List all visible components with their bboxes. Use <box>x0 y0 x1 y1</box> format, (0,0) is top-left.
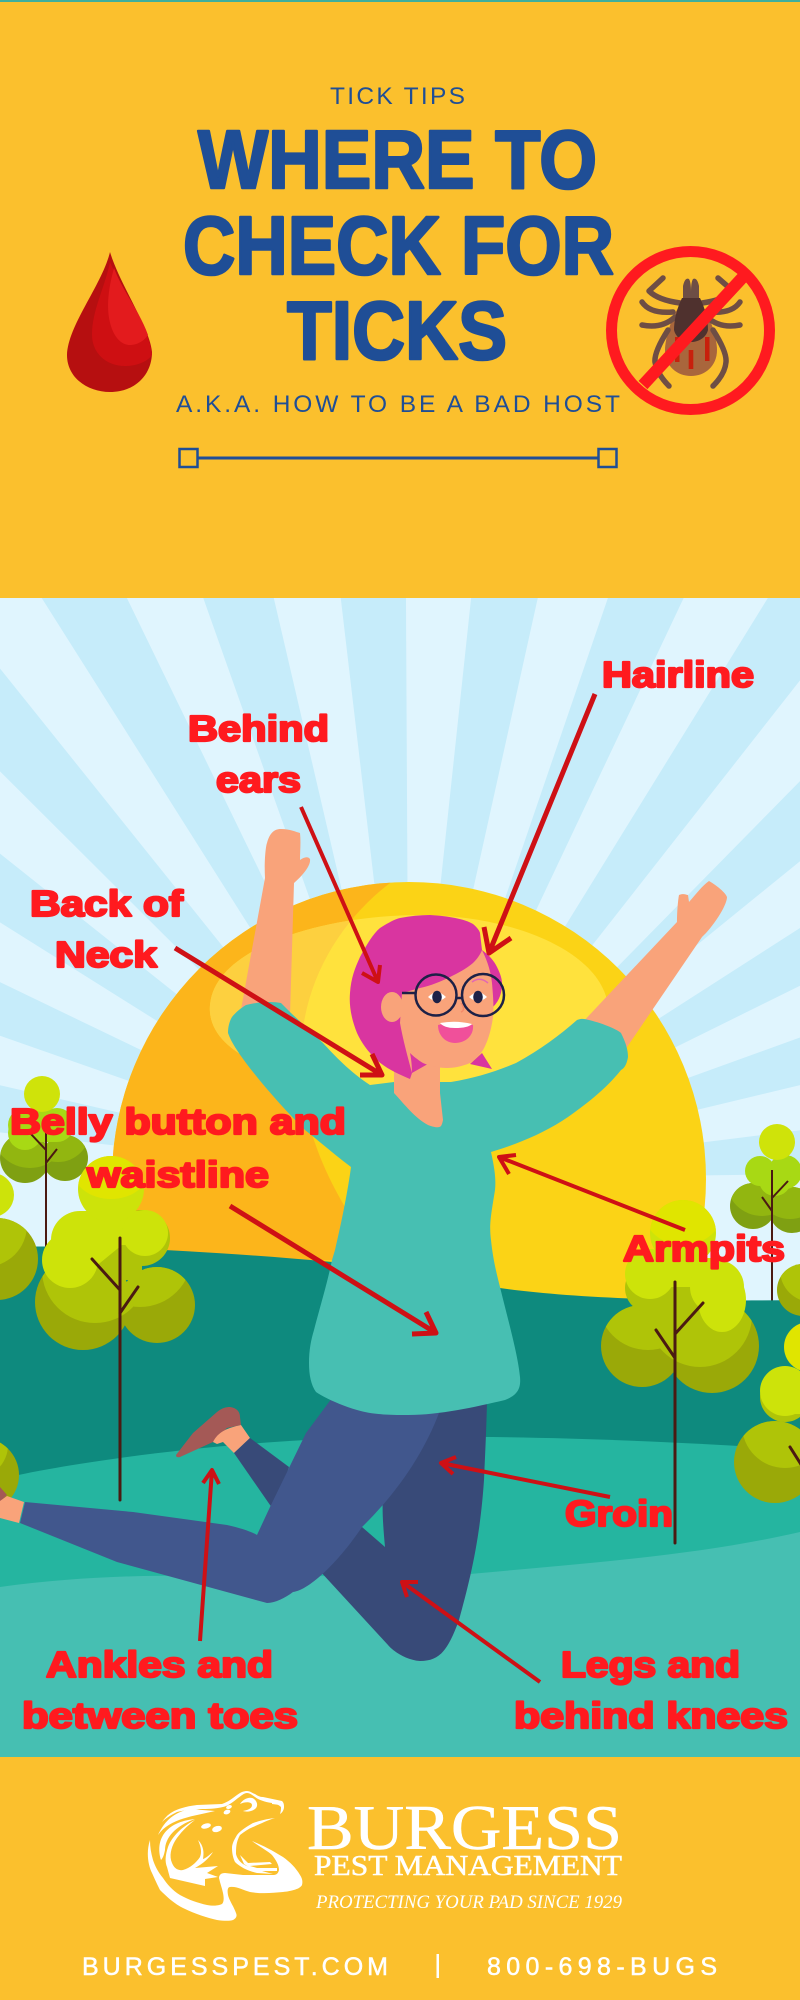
arrow: behind ears <box>301 807 380 982</box>
tree: lower left edge <box>0 1442 19 1500</box>
brand name: PEST MANAGEMENT <box>314 1851 622 1882</box>
ear <box>381 992 403 1022</box>
hills <box>0 1246 800 1760</box>
frog back lines <box>159 1819 195 1860</box>
subtitle: A.K.A. HOW TO BE A BAD HOST <box>176 391 620 418</box>
glasses <box>402 974 504 1016</box>
eyes <box>428 991 487 1003</box>
neck <box>394 1050 443 1127</box>
icon: no ticks sign <box>612 252 770 410</box>
hair tab <box>470 1053 492 1069</box>
tree: right edge upper <box>777 1264 800 1316</box>
frog belly line <box>232 1818 275 1874</box>
raised arm left <box>240 829 310 1015</box>
raised arm right <box>580 881 727 1050</box>
title: WHERE TO <box>198 113 597 206</box>
label: back of neck: Neck <box>55 934 158 975</box>
label: behind ears: ears <box>216 759 301 800</box>
illustration: jumping woman <box>0 829 727 1661</box>
eyebrow <box>472 979 488 983</box>
label: legs and behind knees <box>514 1644 788 1736</box>
tick head <box>683 279 699 299</box>
brand name: BURGESS <box>307 1793 622 1863</box>
label: belly button and waistline: Belly button and <box>10 1101 346 1142</box>
label: hairline: Hairline <box>602 654 754 695</box>
label: belly button and waistline: waistline <box>86 1154 269 1195</box>
arrow: groin <box>441 1457 610 1497</box>
back leg <box>234 1438 289 1510</box>
arrow: hairline <box>484 694 595 953</box>
title <box>183 113 614 377</box>
brand name <box>307 1793 622 1913</box>
logo: frog <box>148 1791 302 1921</box>
mouth <box>438 1022 473 1043</box>
tick legs <box>642 278 740 386</box>
label: behind ears <box>188 708 329 800</box>
shirt <box>228 1002 628 1415</box>
divider with square ends <box>180 449 616 467</box>
panel: header background <box>0 0 800 598</box>
eyebrow: tick tips: TICK TIPS <box>330 83 465 110</box>
arrow: legs <box>402 1582 540 1682</box>
frog spots and eye <box>201 1822 211 1830</box>
tree: left edge <box>0 1173 38 1300</box>
label: legs and behind knees: Legs and <box>561 1644 740 1685</box>
hair back <box>350 915 502 1079</box>
tree: large right <box>598 1183 759 1543</box>
icon: blood drop <box>67 252 152 392</box>
tree: right edge lower <box>734 1322 800 1503</box>
footer contact line: BURGESSPEST.COM <box>82 1953 388 1981</box>
label: back of neck: Back of <box>30 883 184 924</box>
footer contact line <box>82 1953 717 1981</box>
title: CHECK FOR <box>183 199 614 292</box>
lower foot <box>0 1487 24 1523</box>
nose <box>461 1003 464 1012</box>
label: back of neck <box>30 883 184 975</box>
label: ankles and between toes: between toes <box>22 1695 298 1736</box>
arrow: armpits <box>499 1155 685 1230</box>
arrow: back of neck <box>175 948 382 1075</box>
tick body <box>665 298 717 376</box>
panel: sky with sun rays <box>0 598 800 1300</box>
label: legs and behind knees: behind knees <box>514 1695 788 1736</box>
frog body swoosh <box>148 1840 302 1921</box>
arrow: ankles <box>200 1470 219 1641</box>
tree: back right <box>730 1124 800 1300</box>
face <box>400 950 493 1073</box>
tree: back left <box>0 1076 88 1246</box>
label: groin: Groin <box>565 1493 673 1534</box>
label: behind ears: Behind <box>188 708 329 749</box>
panel: footer background <box>0 1757 800 2000</box>
label: ankles and between toes <box>22 1644 298 1736</box>
label: belly button and waistline <box>10 1101 346 1195</box>
footer contact line: 800-698-BUGS <box>487 1953 717 1981</box>
frog hind leg <box>166 1820 218 1886</box>
prohibition ring <box>612 252 770 410</box>
frog toes <box>240 1855 277 1871</box>
title: TICKS <box>287 284 507 377</box>
foot and shoe raised <box>176 1407 250 1457</box>
arrow: belly button <box>230 1206 436 1334</box>
label: ankles and between toes: Ankles and <box>46 1644 273 1685</box>
front leg <box>20 1398 439 1603</box>
label: armpits: Armpits <box>623 1228 785 1269</box>
brand name: PROTECTING YOUR PAD SINCE 1929 <box>315 1892 622 1913</box>
tree: large left <box>35 1141 195 1500</box>
illustration: sun <box>112 882 706 1298</box>
